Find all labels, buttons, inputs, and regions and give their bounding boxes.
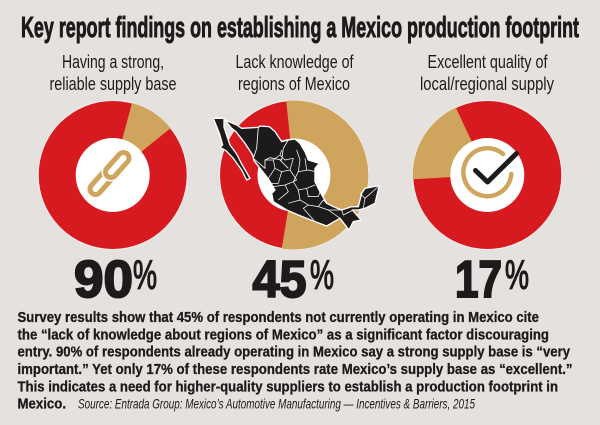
heading: lack of knowledge xyxy=(236,51,354,94)
donut chart: 45% xyxy=(220,100,368,250)
statistic: 90% xyxy=(74,251,157,309)
text block: survey summary xyxy=(18,309,572,413)
heading: strong supply base: Having a strong, xyxy=(62,51,164,72)
statistic: 45%: % xyxy=(310,252,334,298)
heading: strong supply base xyxy=(50,51,176,94)
text block: survey summary: Mexico. xyxy=(18,396,66,413)
panel: strong supply base xyxy=(38,51,187,309)
statistic: 17%: % xyxy=(505,252,529,298)
heading: excellent quality xyxy=(420,51,555,94)
donut chart: 90% xyxy=(38,100,187,250)
icon: check mark in ring xyxy=(463,148,516,196)
text block: survey summary: Survey results show that 45% of respondents not currently operating in Mexico cite xyxy=(18,309,539,326)
heading: excellent quality: local/regional supply xyxy=(420,73,555,94)
statistic: 45%: 45 xyxy=(252,251,306,309)
statistic: 90%: % xyxy=(133,252,157,298)
donut chart: 17% xyxy=(413,100,562,250)
icon: map of Mexico xyxy=(213,118,379,230)
statistic: 90%: 90 xyxy=(74,251,133,309)
heading: lack of knowledge: Lack knowledge of xyxy=(236,51,354,72)
panel: excellent local supply xyxy=(413,51,562,309)
heading: strong supply base: reliable supply base xyxy=(50,73,176,94)
heading: excellent quality: Excellent quality of xyxy=(428,51,548,72)
icon: chain link xyxy=(96,158,124,189)
heading: lack of knowledge: regions of Mexico xyxy=(238,73,350,94)
statistic: 17%: 17 xyxy=(455,251,502,309)
panel: lack of regional knowledge xyxy=(213,51,379,309)
